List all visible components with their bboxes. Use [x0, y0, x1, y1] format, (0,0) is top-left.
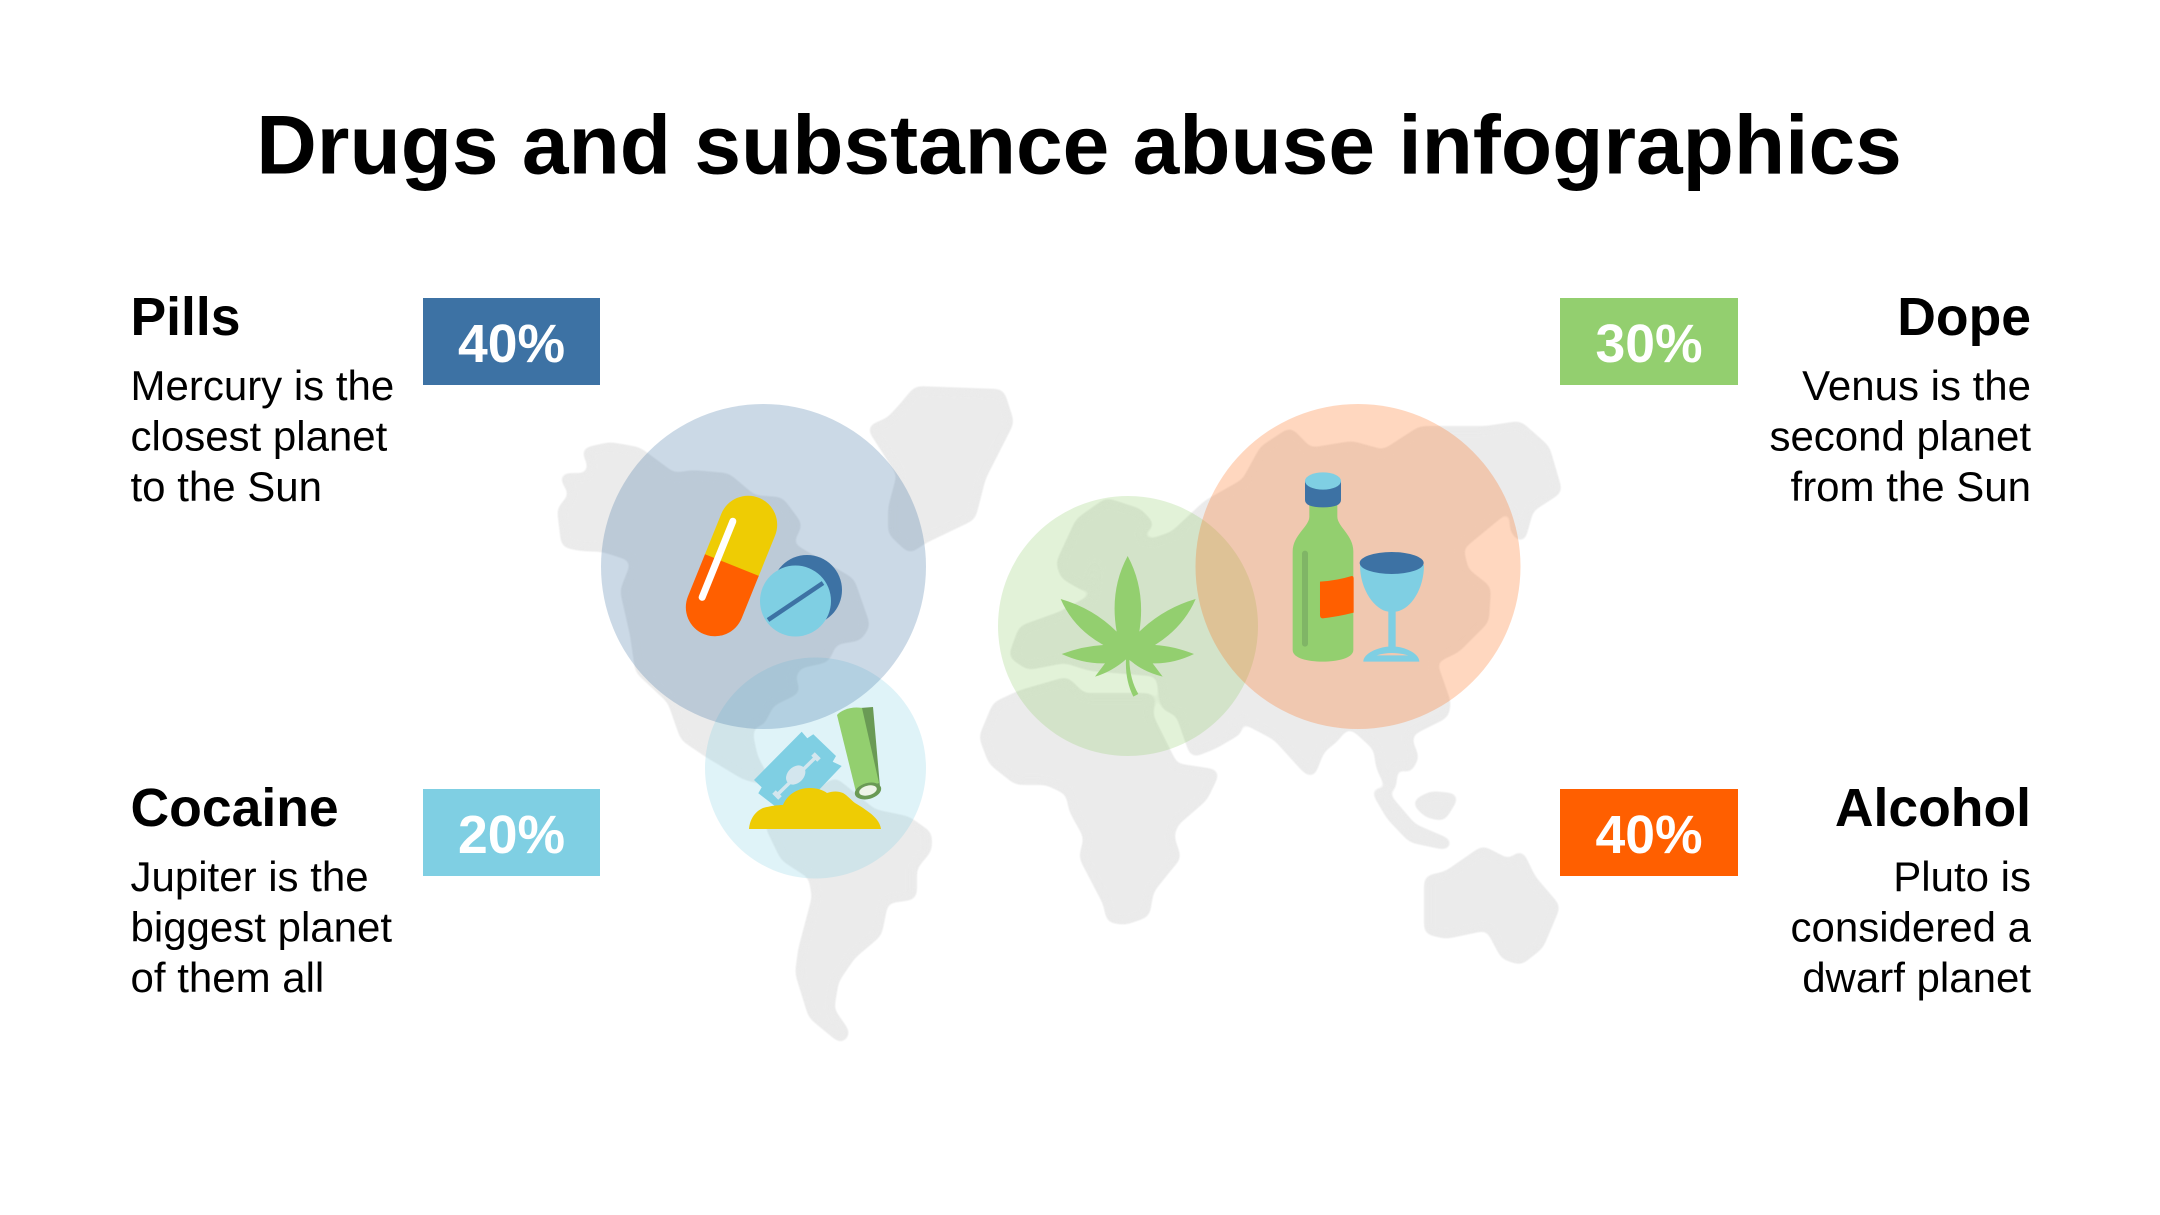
Sumatra and Java: [1377, 792, 1447, 845]
text block: Alcohol description: considered a: [1790, 904, 2032, 950]
North America: [562, 447, 865, 780]
title: Drugs and substance abuse infographics: [256, 98, 1902, 192]
heading: Pills: Pills: [130, 288, 241, 347]
badge: 30%: 30%: [1595, 315, 1703, 374]
badge: 20%: [423, 789, 600, 876]
icon: bottle: [1293, 472, 1354, 662]
badge: 40%: 40%: [1595, 806, 1703, 865]
world map background: [562, 391, 1557, 1038]
badge: 20%: 20%: [458, 806, 565, 865]
circle: alcohol: [1196, 404, 1520, 729]
text block: Pills description: closest planet: [130, 412, 388, 460]
heading: Dope: Dope: [1897, 288, 2031, 347]
Australia: [1429, 851, 1555, 960]
badge: 40%: 40%: [458, 315, 565, 374]
text block: Dope description: second planet: [1769, 412, 2031, 460]
panel: pills: [130, 288, 600, 510]
text block: Cocaine description: biggest planet: [130, 904, 392, 950]
South America: [770, 783, 927, 1038]
text block: Pills description: to the Sun: [130, 463, 322, 510]
text block: Alcohol description: Pluto is: [1893, 853, 2031, 900]
Africa: [984, 682, 1214, 920]
Greenland: [873, 391, 1009, 548]
Borneo: [1418, 796, 1453, 816]
icon: wine glass: [1360, 552, 1424, 662]
circle: pills: [601, 404, 926, 729]
icon: cannabis leaf: [1061, 556, 1196, 697]
panel: cocaine: [130, 779, 600, 1001]
text block: Dope description: from the Sun: [1791, 463, 2031, 510]
panel: dope: [1560, 288, 2031, 510]
badge: 30%: [1560, 298, 1738, 385]
badge: 40%: [1560, 789, 1738, 876]
text block: Alcohol description: dwarf planet: [1802, 954, 2031, 1001]
circle: cocaine: [705, 658, 926, 878]
heading: Alcohol: Alcohol: [1835, 779, 2031, 838]
panel: alcohol: [1560, 779, 2032, 1001]
icon: capsule: [677, 487, 786, 645]
icon: tablet: [760, 555, 842, 636]
badge: 40%: [423, 298, 600, 385]
Eurasia: [1014, 426, 1557, 788]
circle: dope: [998, 496, 1258, 756]
text block: Pills description: Mercury is the: [130, 362, 394, 409]
icon: powder pile: [749, 788, 881, 829]
text block: Cocaine description: Jupiter is the: [130, 853, 369, 900]
heading: Cocaine: Cocaine: [130, 779, 339, 838]
icon: rolled note: [837, 707, 883, 802]
text block: Cocaine description: of them all: [130, 954, 324, 1001]
text block: Dope description: Venus is the: [1802, 362, 2031, 409]
icon: razor blade: [754, 732, 842, 813]
